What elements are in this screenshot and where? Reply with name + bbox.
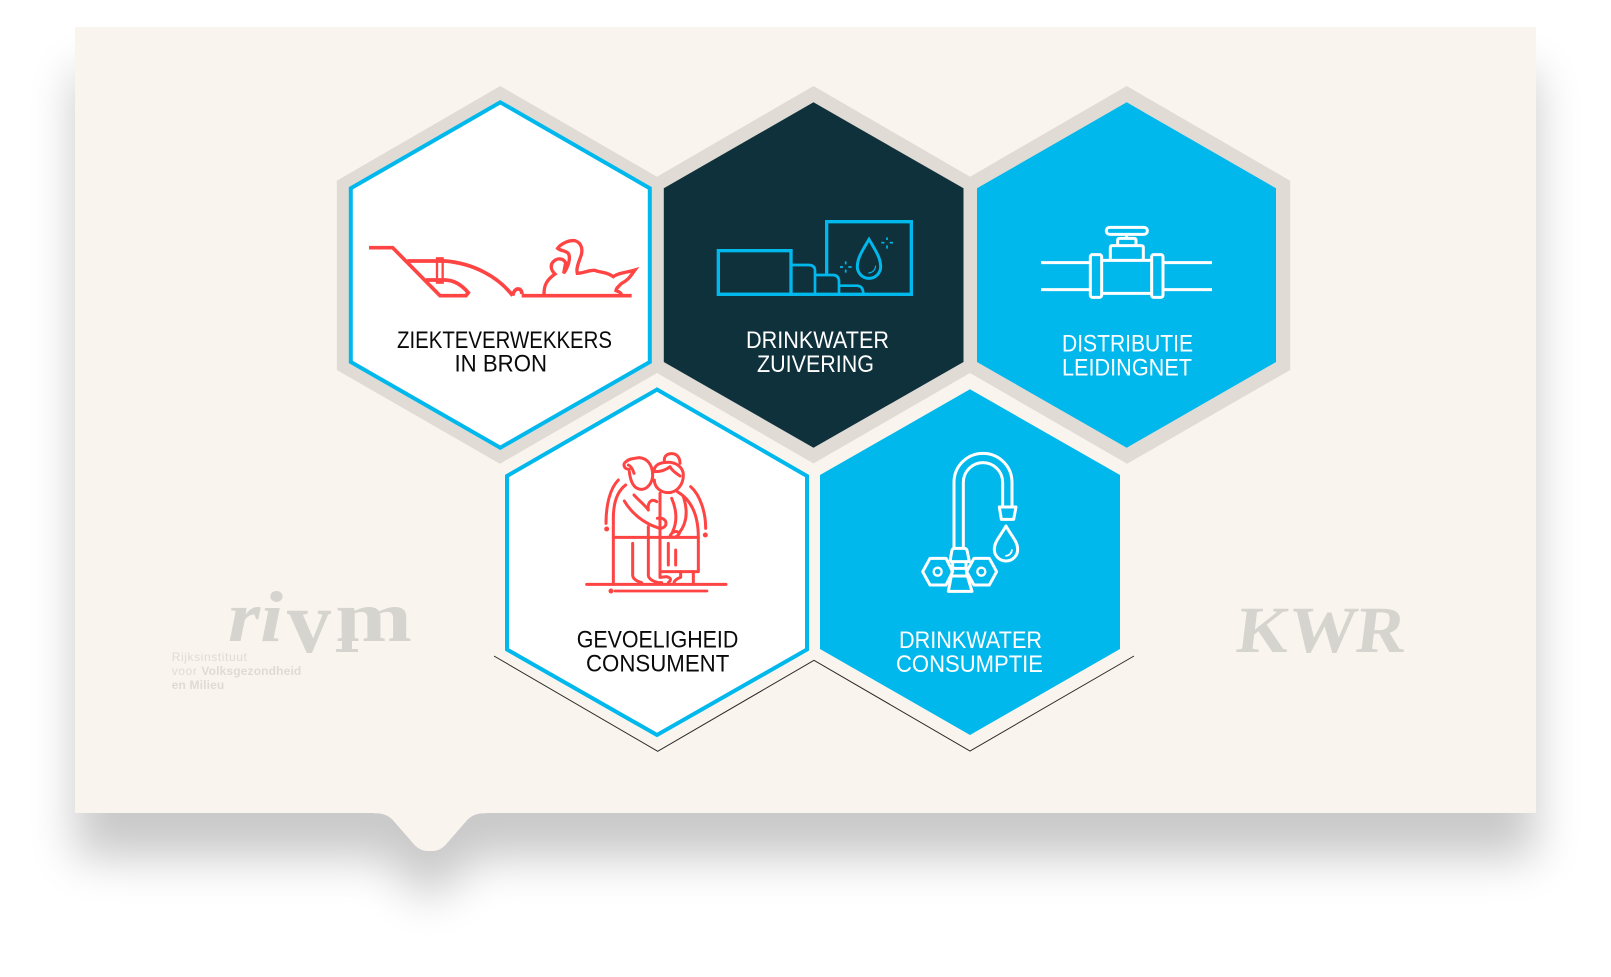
heading: ziekteverwekkers in bron: ZIEKTEVERWEKKERS — [397, 327, 612, 354]
panel: drinkwater zuivering — [664, 102, 964, 448]
logo caption: Volksgezondheid — [201, 664, 301, 678]
panel: drinkwater consumptie — [820, 389, 1120, 735]
panel: cream card with bottom notch — [75, 27, 1536, 851]
icon: elderly couple — [587, 454, 726, 592]
logo: KWR: KWR — [1233, 594, 1411, 667]
heading: ziekteverwekkers in bron: IN BRON — [454, 351, 547, 378]
heading: distributie leidingnet: LEIDINGNET — [1062, 354, 1192, 381]
logo: rivm: m — [335, 577, 412, 657]
panel: distributie leidingnet — [977, 102, 1276, 448]
grey hexagon backing row — [337, 86, 1290, 464]
heading: drinkwater consumptie: CONSUMPTIE — [896, 651, 1043, 678]
heading: drinkwater zuivering: ZUIVERING — [757, 351, 874, 378]
logo: rivm — [172, 573, 412, 692]
logo caption: voor — [172, 664, 201, 678]
heading: drinkwater zuivering: DRINKWATER — [746, 327, 889, 354]
heading: gevoeligheid consument: CONSUMENT — [586, 651, 730, 678]
logo caption: Rijksinstituut — [172, 650, 248, 664]
icon: sewage pipe and duck — [369, 241, 635, 296]
heading: gevoeligheid consument: GEVOELIGHEID — [577, 627, 738, 654]
icon: treatment basins and water drop — [718, 222, 911, 294]
heading: drinkwater consumptie: DRINKWATER — [899, 627, 1042, 654]
logo caption: en Milieu — [172, 678, 224, 692]
icon: pipe valve — [1041, 227, 1212, 297]
panel: gevoeligheid consument — [507, 390, 807, 735]
logo: rivm: v — [287, 573, 331, 672]
heading: distributie leidingnet: DISTRIBUTIE — [1062, 331, 1193, 358]
logo: rivm: ri — [228, 577, 283, 657]
icon: tap with drop — [923, 453, 1018, 591]
thin black outline below lower hexagons — [494, 656, 1134, 751]
panel: ziekteverwekkers in bron — [351, 102, 650, 448]
cream hexagon backing lower row — [494, 373, 1134, 751]
